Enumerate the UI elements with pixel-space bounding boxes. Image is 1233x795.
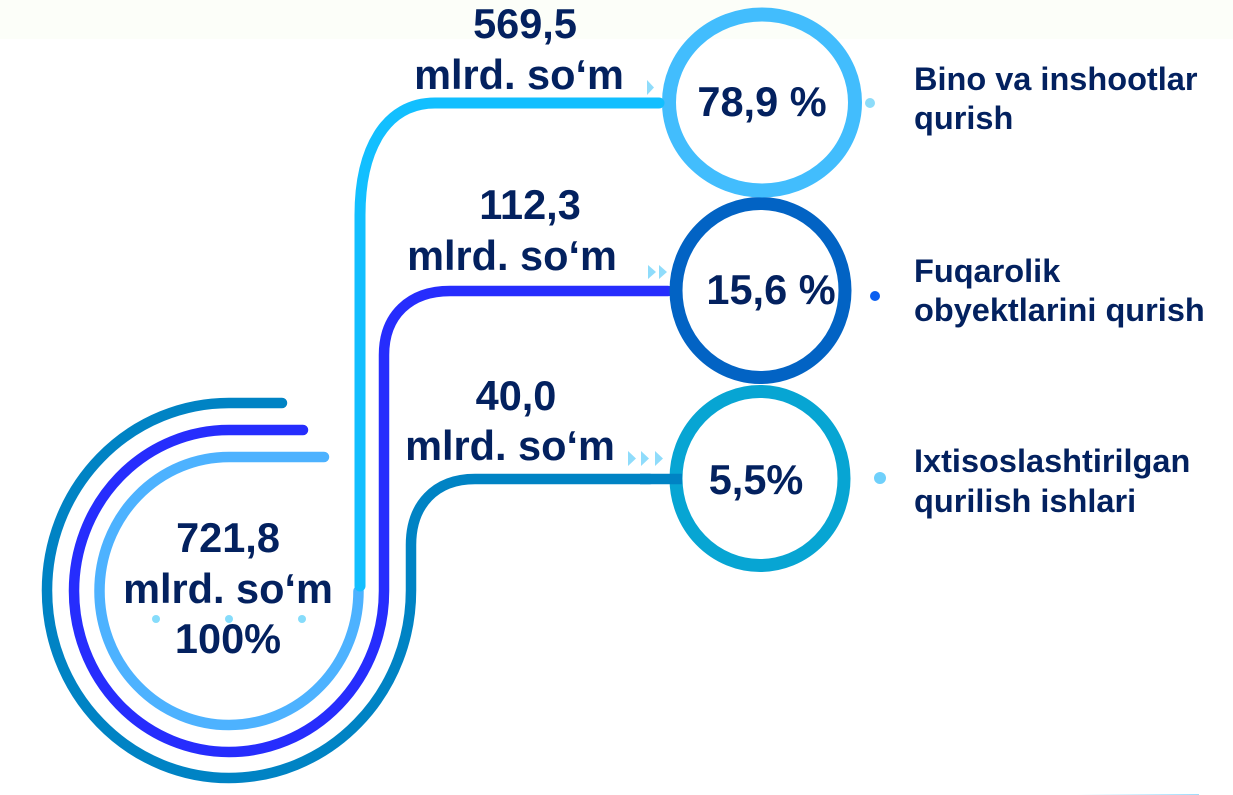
flow line: inner total arc	[99, 457, 358, 725]
center dots	[152, 615, 306, 623]
label: buildings	[914, 61, 1198, 136]
dot: buildings	[865, 98, 875, 108]
label: specialised works: qurilish ishlari	[914, 483, 1136, 519]
dot: specialised	[874, 472, 886, 484]
arrow: triple chevrons	[628, 451, 663, 466]
flow line: specialised construction	[47, 403, 650, 778]
value: 569,5: 569,5	[473, 0, 577, 47]
value: 112,3: 112,3	[479, 181, 581, 228]
total value text	[123, 514, 333, 662]
circle: 78,9% ring	[669, 14, 855, 190]
total value text: 100%	[175, 615, 281, 662]
arrow: double chevrons	[648, 265, 667, 279]
label: civil objects	[914, 253, 1205, 328]
value: 40,0: 40,0	[476, 372, 556, 419]
arrow: single chevron	[647, 80, 654, 95]
label: buildings: qurish	[914, 100, 1013, 136]
percent: 78,9: 78,9 %	[697, 78, 827, 125]
value: 112,3	[407, 181, 617, 279]
total value text: mlrd. so‘m	[123, 565, 333, 612]
value: 40,0: mlrd. so‘m	[405, 422, 615, 469]
flow line end over ring	[640, 474, 682, 484]
flow line: civil objects	[74, 291, 668, 752]
total value text: 721,8	[176, 514, 280, 561]
percent: 5,5: 5,5%	[709, 456, 803, 503]
label: civil objects: obyektlarini qurish	[914, 292, 1205, 328]
value: 569,5: mlrd. so‘m	[414, 51, 624, 98]
value: 569,5	[414, 0, 624, 98]
value: 112,3: mlrd. so‘m	[407, 232, 617, 279]
dot: civil objects	[870, 291, 880, 301]
label: specialised works: Ixtisoslashtirilgan	[914, 443, 1190, 479]
label: buildings: Bino va inshootlar	[914, 61, 1198, 97]
circle: 5,5% ring	[676, 392, 844, 566]
circle: 15,6% ring	[676, 204, 845, 378]
value: 40,0	[405, 372, 615, 469]
label: civil objects: Fuqarolik	[914, 253, 1061, 289]
flow line: buildings and structures	[360, 103, 659, 586]
label: specialised works	[914, 443, 1190, 519]
percent: 15,6: 15,6 %	[706, 266, 836, 313]
